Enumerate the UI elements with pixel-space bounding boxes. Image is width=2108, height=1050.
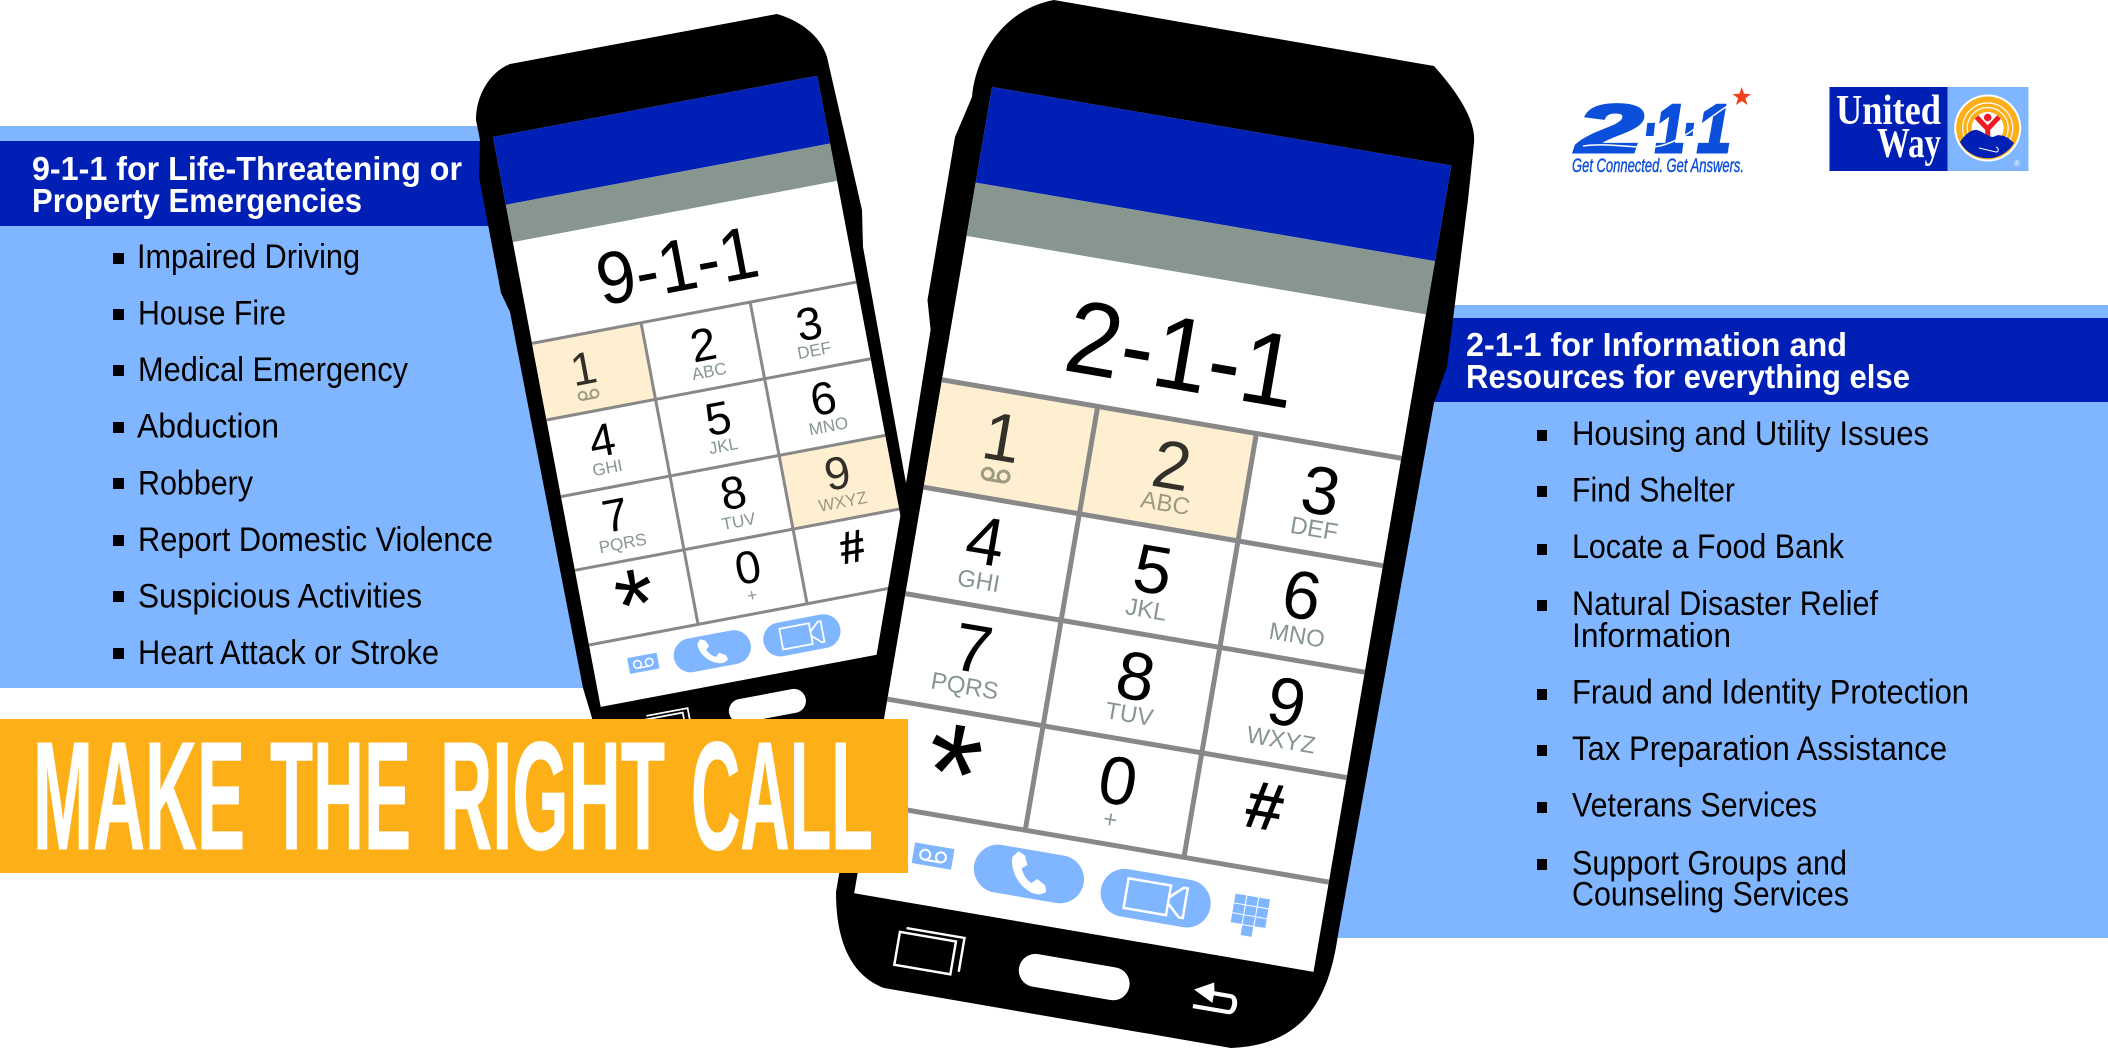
list: 9-1-1 emergencies xyxy=(113,238,493,672)
screen: 2-1-1 dialer: 9 xyxy=(1261,662,1312,743)
banner: make the right call: RIGHT xyxy=(440,710,665,882)
screen: 2-1-1 dialer: 4 xyxy=(960,501,1010,582)
icon: United Way emblem xyxy=(1954,94,2021,168)
screen: 2-1-1 dialer xyxy=(843,87,1451,1035)
screen: 9-1-1 dialer: 3 xyxy=(792,296,827,351)
heading bar: 2-1-1 xyxy=(1400,318,2108,402)
screen: 9-1-1 dialer: 1 xyxy=(566,340,601,396)
list: 9-1-1 emergencies: Impaired Driving xyxy=(137,238,360,276)
screen: 9-1-1 dialer xyxy=(493,76,933,751)
logo: United Way xyxy=(1830,87,2028,171)
screen: 2-1-1 dialer: 2 xyxy=(1147,425,1197,506)
screen: 9-1-1 dialer: 6 xyxy=(806,370,841,426)
logo: 2-1-1: · xyxy=(1643,91,1657,167)
screen: 2-1-1 dialer: # xyxy=(1240,766,1290,847)
banner: make the right call xyxy=(0,710,908,882)
list: 2-1-1 services: Fraud and Identity Protection xyxy=(1572,674,1969,712)
screen: 2-1-1 dialer: JKL xyxy=(1123,593,1169,627)
banner: make the right call: CALL xyxy=(691,710,873,882)
list: 2-1-1 services: Information xyxy=(1572,617,1731,655)
screen: 9-1-1 dialer: MNO xyxy=(807,413,850,439)
list: 2-1-1 services xyxy=(1537,415,1969,914)
logo: United Way: Way xyxy=(1877,121,1941,167)
screen: 9-1-1 dialer: 7 xyxy=(598,487,633,543)
heading bar: 9-1-1 xyxy=(0,141,520,226)
heading: 9-1-1 for life-threatening emergencies: Property Emergencies xyxy=(32,182,362,219)
screen: 2-1-1 dialer: 3 xyxy=(1296,451,1346,532)
logo: 2-1-1: · xyxy=(1682,91,1696,167)
screen: 9-1-1 dialer: 0 xyxy=(730,539,765,595)
icon: keypad xyxy=(1229,894,1270,939)
phone: 2-1-1 large phone xyxy=(836,0,1474,1048)
screen: 2-1-1 dialer: 8 xyxy=(1111,636,1161,717)
list: 2-1-1 services: Counseling Services xyxy=(1572,876,1849,914)
screen: 2-1-1 dialer: PQRS xyxy=(929,667,1000,705)
list: 9-1-1 emergencies: Abduction xyxy=(137,408,279,446)
screen: 2-1-1 dialer: 5 xyxy=(1128,529,1178,611)
screen: 9-1-1 dialer: 5 xyxy=(701,390,736,446)
screen: 9-1-1 dialer: 2 xyxy=(686,317,721,373)
screen: 9-1-1 dialer: 9 xyxy=(820,445,855,501)
screen: 9-1-1 dialer: 4 xyxy=(585,412,620,468)
logo: 2-1-1: 1 xyxy=(1697,91,1731,167)
list: 9-1-1 emergencies: Suspicious Activities xyxy=(138,578,422,616)
list: 2-1-1 services: Natural Disaster Relief xyxy=(1572,585,1878,623)
heading: 2-1-1 for information and resources: Resources for everything else xyxy=(1466,358,1910,395)
logo: United Way: United xyxy=(1836,88,1941,134)
screen: 9-1-1 dialer: 8 xyxy=(716,465,751,521)
screen: 2-1-1 dialer: MNO xyxy=(1267,618,1327,654)
list: 9-1-1 emergencies: Robbery xyxy=(138,464,253,502)
screen: 9-1-1 dialer: PQRS xyxy=(597,530,648,557)
screen: 9-1-1 dialer: ABC xyxy=(690,359,728,384)
banner: make the right call: THE xyxy=(270,710,411,882)
logo: 2-1-1 xyxy=(1572,87,1751,177)
screen: 9-1-1 dialer: # xyxy=(835,519,869,574)
list: 2-1-1 services: Tax Preparation Assistance xyxy=(1572,730,1947,768)
panel: 2-1-1 list background xyxy=(1320,305,2108,938)
logo: 2-1-1: 1 xyxy=(1655,91,1685,167)
heading: 9-1-1 for life-threatening emergencies: 9-1-1 for Life-Threatening or xyxy=(32,150,462,187)
heading: 2-1-1 for information and resources: 2-1-1 for Information and xyxy=(1466,326,1847,363)
icon: United Way emblem: ® xyxy=(2014,159,2020,168)
screen: 9-1-1 dialer: + xyxy=(745,585,759,606)
screen: 2-1-1 dialer: * xyxy=(912,691,992,855)
screen: 9-1-1 dialer: TUV xyxy=(720,509,758,534)
banner: make the right call: MAKE xyxy=(33,710,245,882)
screen: 2-1-1 dialer: 0 xyxy=(1093,740,1143,822)
icon: back arrow xyxy=(1191,979,1240,1015)
list: 2-1-1 services: Find Shelter xyxy=(1572,472,1735,510)
screen: 9-1-1 dialer: * xyxy=(607,546,666,663)
screen: 2-1-1 dialer: + xyxy=(1101,805,1119,834)
screen: 2-1-1 dialer: TUV xyxy=(1103,697,1155,732)
screen: 2-1-1 dialer: 2-1-1 xyxy=(1057,278,1306,431)
screen: 9-1-1 dialer: DEF xyxy=(796,338,833,363)
screen: 2-1-1 dialer: 1 xyxy=(977,397,1027,478)
heading: 2-1-1 for information and resources xyxy=(1466,326,1910,395)
screen: 2-1-1 dialer: DEF xyxy=(1288,512,1340,546)
screen: 2-1-1 dialer: GHI xyxy=(955,564,1002,598)
list: 9-1-1 emergencies: House Fire xyxy=(138,295,286,333)
logo: 2-1-1: Get Connected. Get Answers. xyxy=(1572,156,1744,177)
list: 2-1-1 services: Support Groups and xyxy=(1572,844,1847,882)
phone: 9-1-1 small phone xyxy=(476,14,933,760)
icon: recent apps xyxy=(894,927,965,976)
list: 9-1-1 emergencies: Medical Emergency xyxy=(138,351,408,389)
logo: 2-1-1: 2 xyxy=(1574,91,1643,167)
heading: 9-1-1 for life-threatening emergencies xyxy=(32,150,462,219)
list: 2-1-1 services: Housing and Utility Issues xyxy=(1572,415,1929,453)
screen: 9-1-1 dialer: 9-1-1 xyxy=(589,210,765,321)
screen: 2-1-1 dialer: WXYZ xyxy=(1245,721,1317,760)
screen: 2-1-1 dialer: 6 xyxy=(1277,555,1327,636)
list: 9-1-1 emergencies: Heart Attack or Stroke xyxy=(138,634,439,672)
screen: 2-1-1 dialer: ABC xyxy=(1139,486,1192,521)
list: 9-1-1 emergencies: Report Domestic Violence xyxy=(138,521,493,559)
list: 2-1-1 services: Locate a Food Bank xyxy=(1572,528,1845,566)
screen: 9-1-1 dialer: WXYZ xyxy=(817,488,869,516)
screen: 9-1-1 dialer: JKL xyxy=(707,434,740,458)
panel: 9-1-1 list background xyxy=(0,126,600,688)
list: 2-1-1 services: Veterans Services xyxy=(1572,787,1817,825)
screen: 2-1-1 dialer: 7 xyxy=(948,608,998,689)
logo: 2-1-1: TM xyxy=(1720,148,1729,154)
screen: 9-1-1 dialer: GHI xyxy=(591,456,624,480)
